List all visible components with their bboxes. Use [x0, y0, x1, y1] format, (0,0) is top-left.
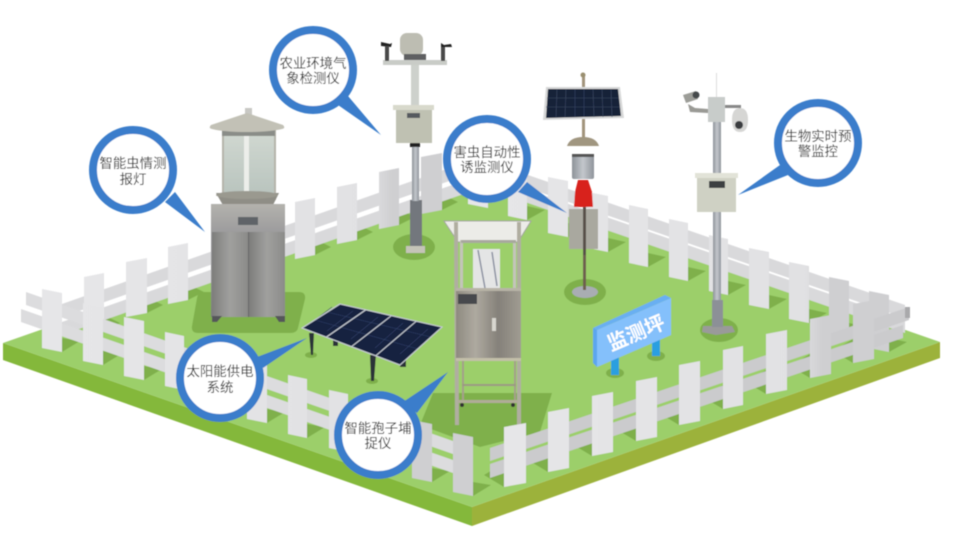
- front fences: [21, 289, 910, 496]
- back fences: [62, 148, 907, 352]
- device: biological real-time camera pole: [683, 73, 748, 342]
- callout: biological monitoring: 生物实时预: [785, 129, 851, 144]
- device: pest attractant monitor: [543, 72, 624, 305]
- callout: weather station: 农业环境气: [280, 56, 346, 71]
- callout: weather station: 象检测仪: [286, 71, 340, 86]
- device: solar panel array: [302, 304, 442, 384]
- sign: monitoring plot: [593, 295, 671, 378]
- device: spore catcher: [420, 221, 552, 447]
- callout: spore catcher: [338, 372, 448, 475]
- device: agricultural weather station: [381, 33, 452, 260]
- callout: spore catcher: 捉仪: [365, 436, 391, 451]
- callout: insect light trap: 报灯: [120, 172, 146, 187]
- callout: weather station: [273, 30, 381, 135]
- callout: biological monitoring: [738, 103, 858, 195]
- green platform: [3, 179, 940, 526]
- callout: pest monitor: 害虫自动性: [454, 145, 520, 160]
- callout: pest monitor: 诱监测仪: [460, 160, 514, 175]
- sign text: 监测坪: [604, 311, 668, 356]
- callout: insect light trap: [93, 130, 205, 232]
- callout: biological monitoring: 警监控: [798, 144, 838, 159]
- callout: solar power: [180, 338, 307, 418]
- callout: solar power: 太阳能供电: [187, 364, 253, 379]
- callout: spore catcher: 智能孢子埔: [345, 421, 411, 436]
- callout: insect light trap: 智能虫情测: [100, 156, 166, 171]
- device: intelligent insect light trap: [192, 108, 305, 333]
- callout: solar power: 系统: [207, 380, 233, 395]
- callout: pest monitor: [447, 119, 567, 213]
